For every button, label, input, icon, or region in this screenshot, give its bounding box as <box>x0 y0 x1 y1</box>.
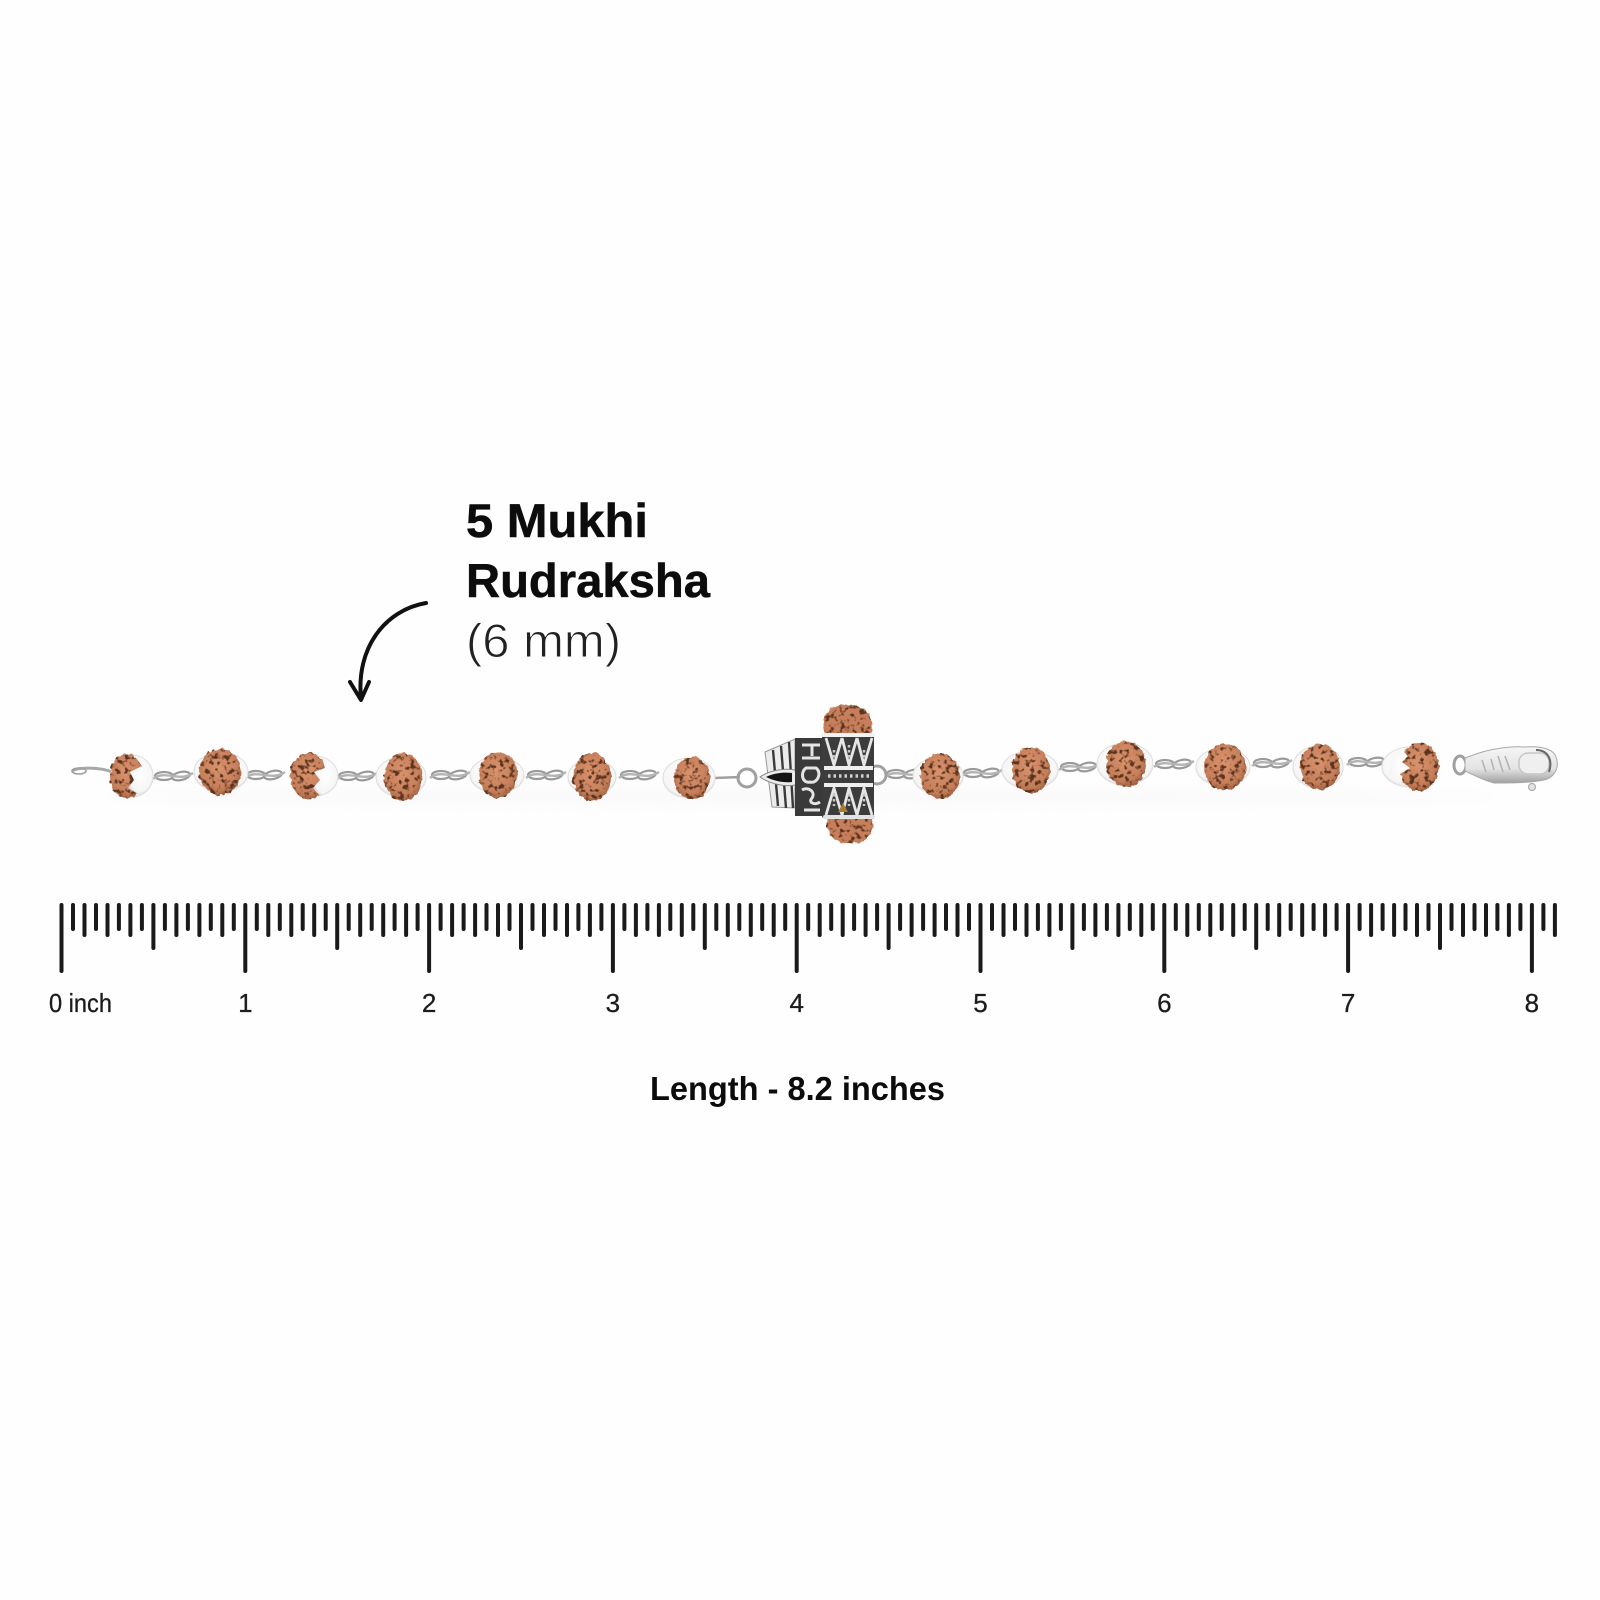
bead scalloped silver caps <box>128 750 1410 796</box>
pendant: Rudraksha capsule with silver Shiva motif <box>738 705 886 843</box>
callout heading: 5 Mukhi Rudraksha (6 mm): Rudraksha <box>466 554 711 607</box>
ruler labels: 5 <box>973 988 988 1018</box>
pendant bottom bead <box>827 805 873 843</box>
callout heading: 5 Mukhi Rudraksha (6 mm): (6 mm) <box>466 614 621 667</box>
bracelet <box>72 705 1557 843</box>
chain links <box>72 756 1387 782</box>
ruler labels: 7 <box>1341 988 1355 1018</box>
drum body <box>821 733 875 819</box>
lobster clasp <box>1454 747 1557 790</box>
ruler labels: 0 inch <box>49 988 112 1018</box>
ruler labels: 2 <box>422 988 436 1018</box>
ruler labels: 1 <box>238 988 253 1018</box>
ruler labels: 3 <box>606 988 620 1018</box>
length caption: Length - 8.2 inches <box>650 1070 945 1107</box>
trident wing <box>760 739 796 808</box>
beads: silver caps <box>111 743 1438 798</box>
left ring <box>738 769 756 787</box>
script panel <box>795 738 824 816</box>
pendant top bead <box>823 705 872 745</box>
ruler labels: 4 <box>789 988 804 1018</box>
icon: curved arrow pointing to bead <box>350 603 426 700</box>
ruler labels: 8 <box>1525 988 1539 1018</box>
callout heading: 5 Mukhi Rudraksha (6 mm) <box>466 494 711 667</box>
ruler ticks <box>62 905 1555 971</box>
right ring <box>868 766 886 784</box>
ruler labels: 6 <box>1157 988 1172 1018</box>
ruler labels <box>49 988 1539 1018</box>
callout heading: 5 Mukhi Rudraksha (6 mm): 5 Mukhi <box>466 494 648 547</box>
soft shadow under bracelet <box>100 789 1500 805</box>
beads: rudraksha <box>110 741 1439 801</box>
